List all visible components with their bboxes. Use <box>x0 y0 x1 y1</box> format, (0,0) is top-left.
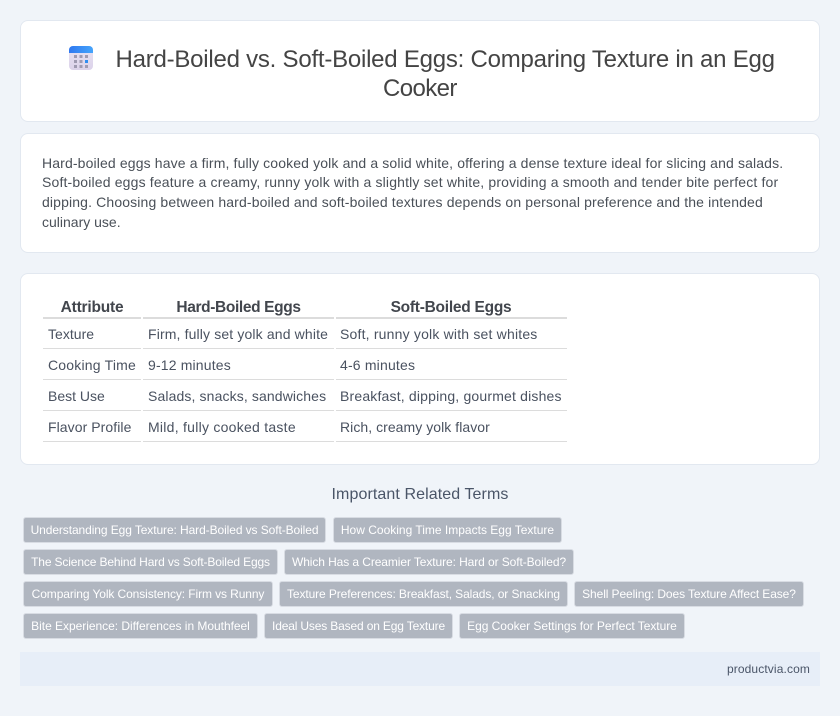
row: cooking time: 9-12 minutes <box>148 357 231 373</box>
tag <box>23 549 278 575</box>
tag: Comparing Yolk Consistency: Firm vs Runny <box>32 587 264 601</box>
heading: important related terms: Important Related Terms <box>332 486 508 503</box>
tag: The Science Behind Hard vs Soft-Boiled Eggs <box>31 555 270 569</box>
tag <box>284 549 574 575</box>
tag list <box>23 517 804 639</box>
text block: description: culinary use. <box>42 214 121 230</box>
footer text: productvia.com <box>727 662 810 676</box>
row: best use: Breakfast, dipping, gourmet dishes <box>340 388 562 404</box>
icon: calendar <box>69 46 93 70</box>
row: cooking time: 4-6 minutes <box>340 357 415 373</box>
text block: description: Soft-boiled eggs feature a creamy, runny yolk with a slightly set white, providing a smooth and tender bite perfect for <box>42 174 778 190</box>
text block: description <box>42 155 783 230</box>
tag <box>333 517 562 543</box>
tag: Egg Cooker Settings for Perfect Texture <box>467 619 677 633</box>
row: flavor profile: Mild, fully cooked taste <box>148 419 296 435</box>
row: flavor profile <box>48 419 490 435</box>
table header: hard-boiled: Hard-Boiled Eggs <box>176 299 301 316</box>
panel: description <box>20 133 820 253</box>
title: Cooker <box>383 75 457 102</box>
footer bar <box>20 652 820 686</box>
row: texture: Soft, runny yolk with set whites <box>340 326 538 342</box>
title <box>116 46 775 102</box>
row: best use: Best Use <box>48 388 105 404</box>
tag: Texture Preferences: Breakfast, Salads, or Snacking <box>287 587 560 601</box>
text block: description: Hard-boiled eggs have a firm, fully cooked yolk and a solid white, offering a dense texture ideal for slicing and salads. <box>42 155 783 171</box>
text block: description: dipping. Choosing between hard-boiled and soft-boiled textures depends on personal preference and the intended <box>42 194 763 210</box>
row: texture <box>48 326 538 342</box>
row: texture: Texture <box>48 326 94 342</box>
table header: attribute: Attribute <box>61 299 123 316</box>
row: flavor profile: Flavor Profile <box>48 419 131 435</box>
tag: Which Has a Creamier Texture: Hard or Soft-Boiled? <box>292 555 566 569</box>
row: texture: Firm, fully set yolk and white <box>148 326 328 342</box>
row: best use: Salads, snacks, sandwiches <box>148 388 326 404</box>
row: best use <box>48 388 562 404</box>
panel: title header <box>20 20 820 122</box>
tag: How Cooking Time Impacts Egg Texture <box>341 523 554 537</box>
panel: comparison table <box>20 273 820 465</box>
tag <box>574 581 804 607</box>
table header: soft-boiled: Soft-Boiled Eggs <box>391 299 511 316</box>
tag <box>279 581 568 607</box>
row: flavor profile: Rich, creamy yolk flavor <box>340 419 490 435</box>
tag <box>23 613 258 639</box>
row: cooking time <box>48 357 415 373</box>
title: Hard-Boiled vs. Soft-Boiled Eggs: Comparing Texture in an Egg <box>116 46 775 73</box>
tag <box>23 581 273 607</box>
tag: Ideal Uses Based on Egg Texture <box>272 619 445 633</box>
tag <box>264 613 453 639</box>
tag: Bite Experience: Differences in Mouthfeel <box>31 619 250 633</box>
tag: Shell Peeling: Does Texture Affect Ease? <box>582 587 796 601</box>
tag <box>459 613 685 639</box>
tag <box>23 517 326 543</box>
row: cooking time: Cooking Time <box>48 357 136 373</box>
tag: Understanding Egg Texture: Hard-Boiled vs Soft-Boiled <box>31 523 318 537</box>
